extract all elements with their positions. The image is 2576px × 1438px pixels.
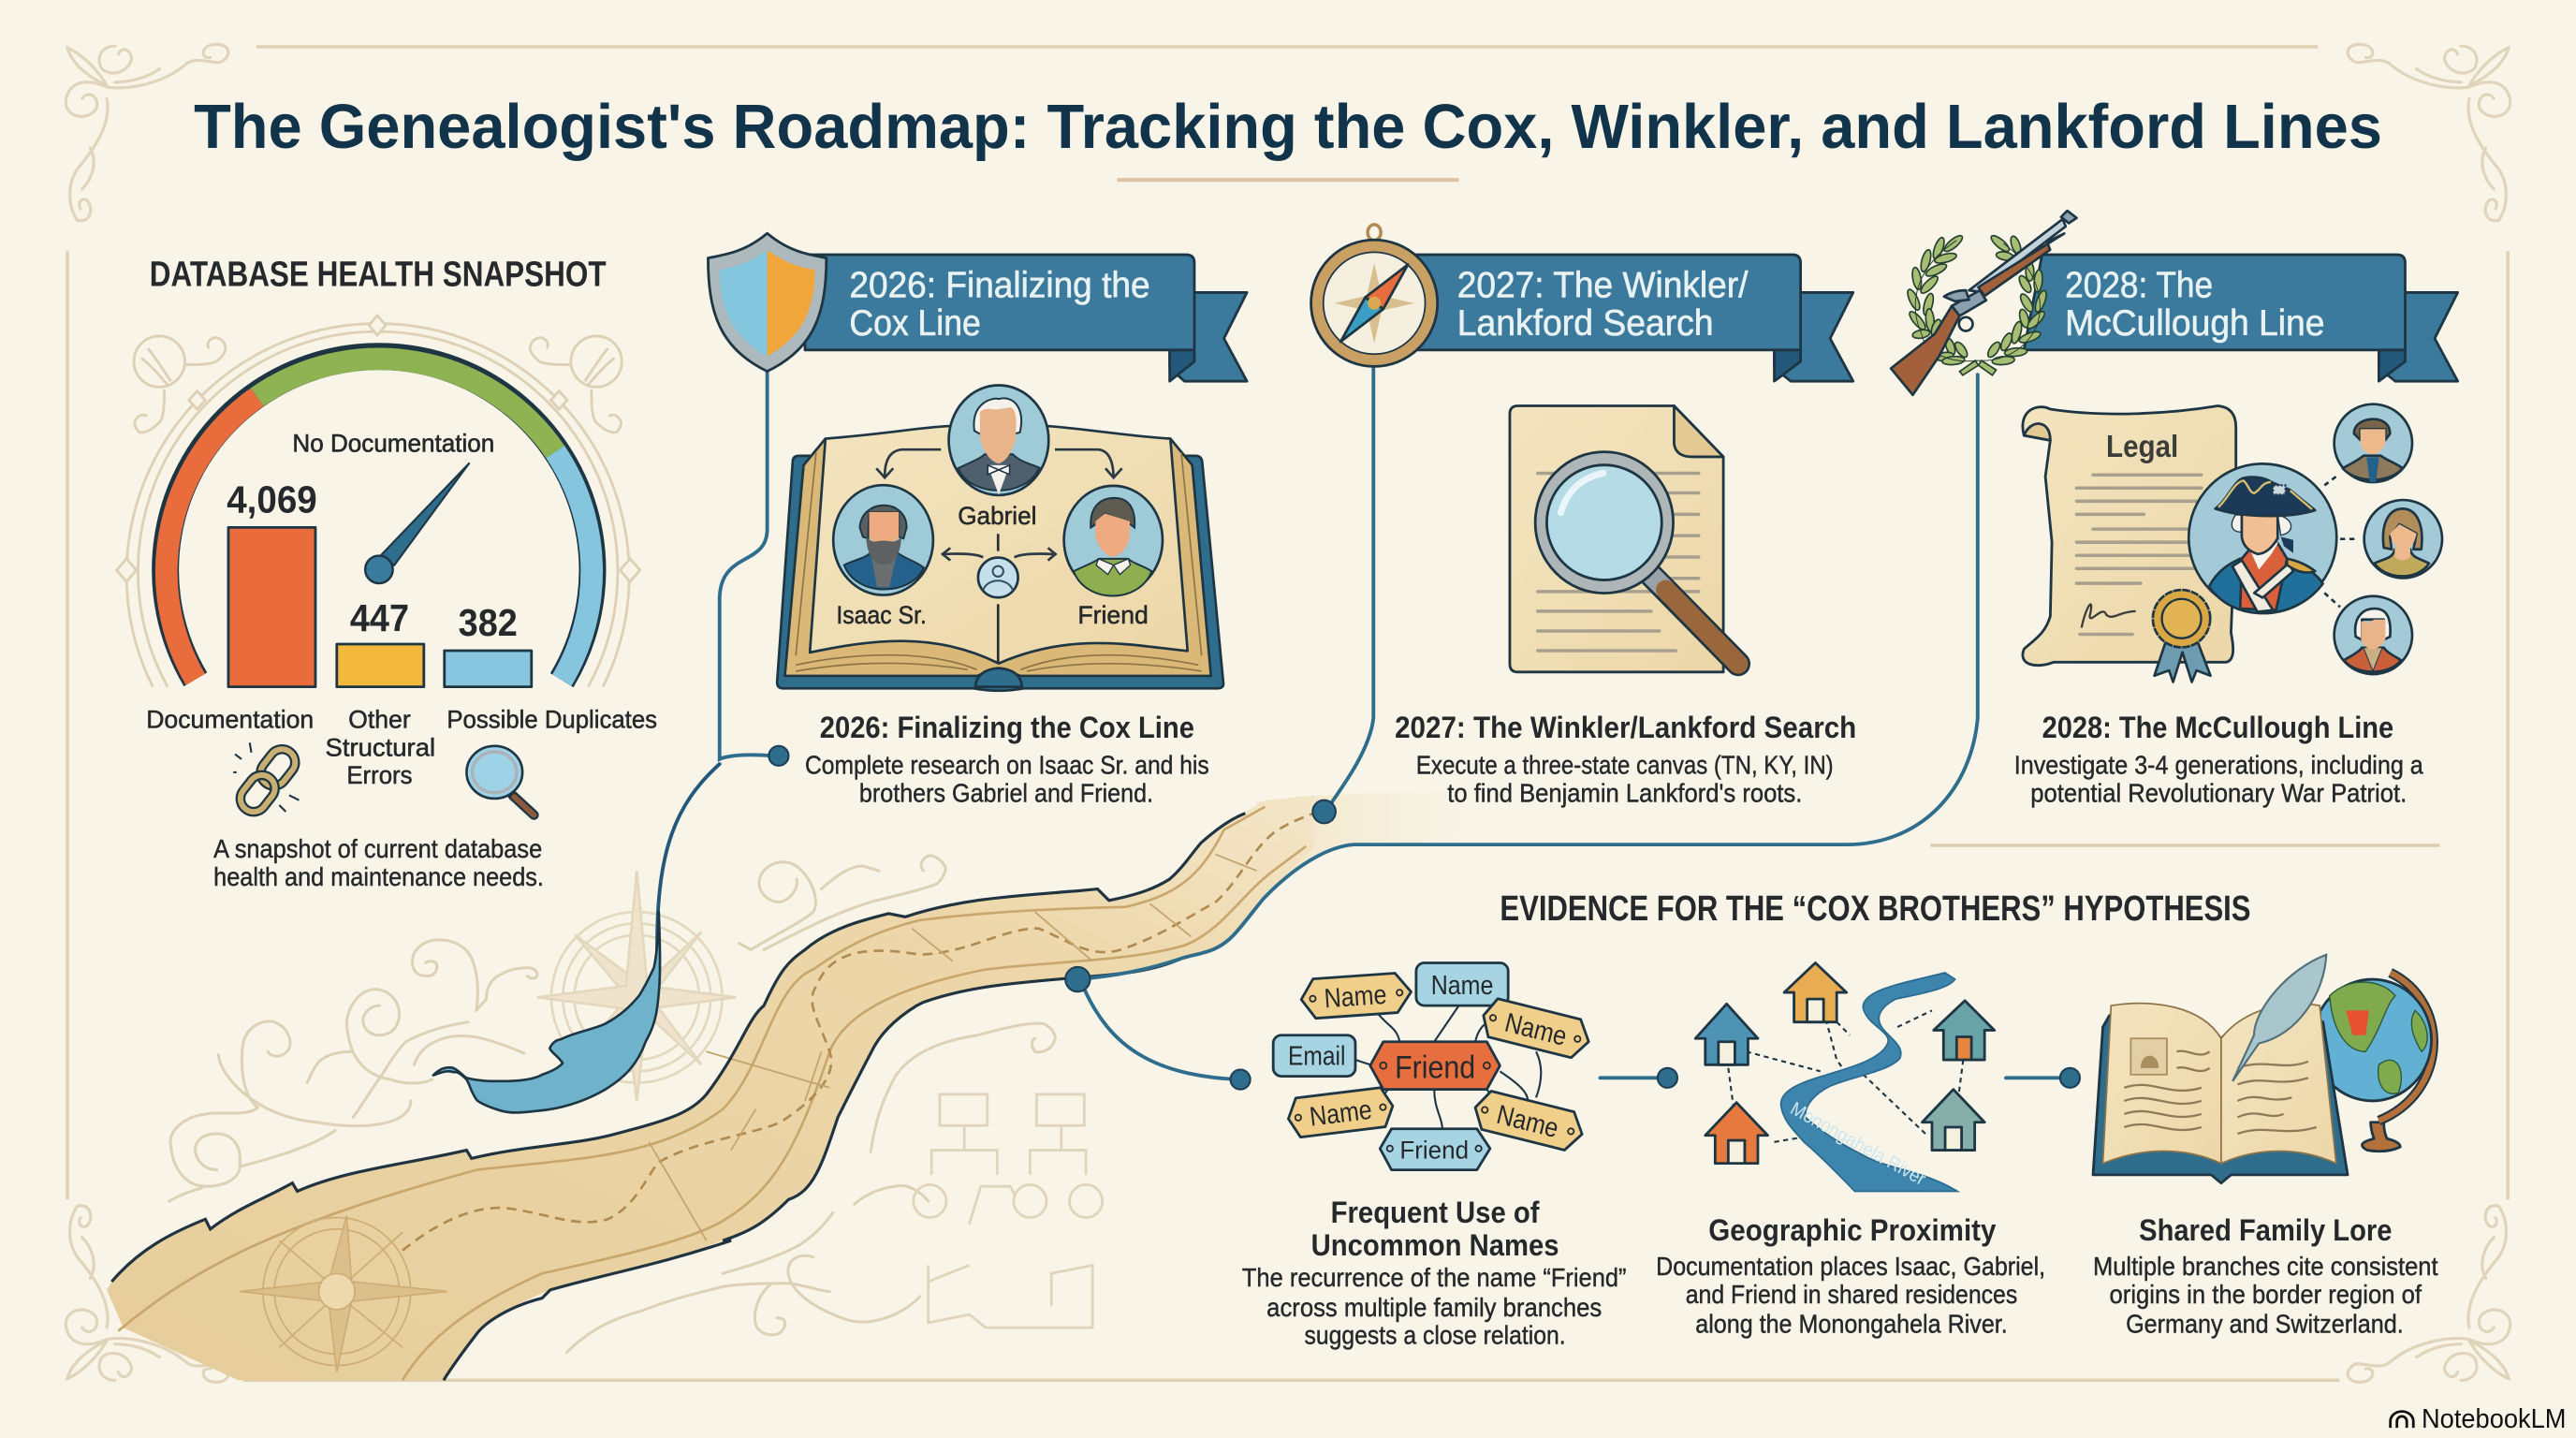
evidence: geographic proximity text: Geographic Proximity: [1708, 1213, 1996, 1247]
bar: possible duplicates 382: 382: [459, 601, 518, 644]
milestone 2028 text: [2014, 711, 2423, 807]
scroll heading: Legal: [2106, 430, 2178, 464]
milestone 2027 text: [1395, 711, 1856, 807]
snapshot heading: DATABASE HEALTH SNAPSHOT: [150, 254, 607, 293]
banner 2026: Cox Line: [849, 303, 981, 344]
banner 2027: [1397, 255, 1853, 381]
bar labels: Other: [348, 705, 411, 734]
illustration: book, quill and globe: [2093, 955, 2434, 1183]
book labels: [836, 501, 1149, 629]
evidence: geographic proximity text: Documentation places Isaac, Gabriel,: [1656, 1252, 2045, 1281]
evidence: geographic proximity text: and Friend in shared residences: [1686, 1280, 2017, 1309]
connector dots: [768, 746, 2080, 1090]
evidence: geographic proximity text: along the Monongahela River.: [1695, 1309, 2008, 1338]
bar: other structural errors 447: 447: [350, 596, 409, 639]
title: The Genealogist's Roadmap: Tracking the Cox, Winkler, and Lankford Lines: [194, 93, 2382, 162]
seal: [2153, 590, 2211, 682]
bar: documentation 4,069: [227, 478, 317, 687]
milestone 2027 text: to find Benjamin Lankford's roots.: [1447, 778, 1802, 807]
house yellow: [1784, 962, 1847, 1022]
icon: broken chain: [233, 742, 300, 817]
portrait: Friend: [1064, 486, 1163, 596]
evidence: uncommon names text: Frequent Use of: [1331, 1196, 1540, 1229]
dotted links: [2324, 476, 2359, 607]
snapshot caption: A snapshot of current database: [213, 834, 542, 863]
house teal: [1934, 1001, 1995, 1060]
node: Friend centre: Friend: [1395, 1049, 1475, 1085]
gauge arc: [166, 357, 593, 681]
compass rose on road: [240, 1216, 446, 1372]
node: Name 2: [1416, 962, 1508, 1005]
center icon: [978, 558, 1018, 597]
icon: compass: [1311, 225, 1438, 366]
blue ribbon tail: [433, 912, 660, 1112]
banner 2027: 2027: The Winkler/: [1457, 266, 1749, 306]
signature: [2082, 605, 2136, 627]
node: Friend centre: [1370, 1042, 1500, 1090]
node: Name 1: [1300, 972, 1412, 1020]
evidence: uncommon names text: suggests a close relation.: [1305, 1321, 1566, 1350]
book labels: Friend: [1077, 600, 1149, 629]
portrait middle: [2364, 500, 2442, 578]
node: Name 4: Name: [1308, 1095, 1373, 1133]
evidence: uncommon names text: [1242, 1196, 1627, 1350]
parchment road: [107, 792, 1471, 1380]
illustration: document under magnifier: [1510, 406, 1738, 672]
node: Email: [1273, 1035, 1355, 1077]
icon: wreath and musket: [1891, 211, 2077, 395]
portrait: Isaac Sr.: [833, 485, 933, 595]
evidence: uncommon names text: Uncommon Names: [1311, 1228, 1559, 1262]
bar: documentation 4,069: 4,069: [227, 478, 317, 521]
connector lines: [657, 365, 2070, 1079]
house blue: [1695, 1004, 1758, 1064]
bar labels: Possible Duplicates: [446, 705, 657, 734]
snapshot caption: [213, 834, 544, 891]
evidence: shared family lore text: Multiple branches cite consistent: [2093, 1252, 2438, 1281]
house green: [1922, 1090, 1984, 1151]
node: Name 5: Name: [1494, 1100, 1561, 1144]
gauge ornament: [117, 315, 640, 687]
evidence: shared family lore text: Shared Family Lore: [2139, 1213, 2392, 1247]
node: Name 4: [1286, 1086, 1395, 1138]
bar: other structural errors 447: [337, 596, 424, 687]
river label: Monongahela River: [1787, 1098, 1929, 1190]
evidence: geographic proximity text: [1656, 1213, 2045, 1338]
illustration: legal scroll and patriot: [2023, 404, 2442, 682]
banner 2028: 2028: The: [2065, 266, 2213, 306]
background swirls: [169, 856, 1055, 1352]
milestone 2026 text: [805, 711, 1209, 807]
illustration: family book: [777, 386, 1223, 691]
icon: shield: [708, 233, 827, 372]
evidence: shared family lore text: [2093, 1213, 2438, 1338]
bar: possible duplicates 382: [445, 601, 532, 687]
node: Name 2: Name: [1431, 971, 1493, 1001]
milestone 2026 text: 2026: Finalizing the Cox Line: [820, 711, 1194, 744]
milestone 2027 text: Execute a three-state canvas (TN, KY, IN): [1416, 751, 1834, 780]
patriot portrait: [2188, 463, 2336, 613]
node: Name 3: Name: [1501, 1008, 1570, 1052]
snapshot caption: health and maintenance needs.: [213, 862, 544, 891]
NotebookLM watermark: NotebookLM: [2422, 1404, 2566, 1434]
faded compass rose: [537, 871, 736, 1101]
evidence heading: EVIDENCE FOR THE “COX BROTHERS” HYPOTHESIS: [1500, 888, 2250, 928]
bar labels: Structural: [326, 732, 435, 761]
evidence: shared family lore text: origins in the border region of: [2110, 1280, 2422, 1309]
banner 2028: [2024, 255, 2458, 381]
node: Friend lower: Friend: [1399, 1135, 1469, 1164]
evidence: uncommon names text: across multiple family branches: [1266, 1293, 1602, 1322]
node: Name 5: [1471, 1089, 1587, 1153]
evidence: shared family lore text: Germany and Switzerland.: [2126, 1309, 2404, 1338]
section: database health snapshot: [117, 254, 657, 891]
title rule: [1117, 179, 1459, 181]
milestone 2028 text: potential Revolutionary War Patriot.: [2030, 778, 2407, 807]
node: Email: Email: [1288, 1041, 1345, 1071]
illustration: name network: [1273, 962, 1593, 1170]
milestone 2026 text: brothers Gabriel and Friend.: [859, 778, 1153, 807]
portrait bottom: [2334, 596, 2412, 674]
banner 2027: Lankford Search: [1457, 303, 1714, 344]
node: Friend lower: [1380, 1129, 1490, 1170]
milestone 2028 text: Investigate 3-4 generations, including a: [2014, 751, 2423, 780]
banner 2026: 2026: Finalizing the: [849, 266, 1150, 306]
node: Name 3: [1479, 996, 1593, 1061]
gauge needle: [365, 463, 469, 583]
bar labels: [146, 705, 657, 789]
milestone 2027 text: 2027: The Winkler/Lankford Search: [1395, 711, 1856, 744]
banner 2026: [805, 255, 1247, 381]
arrows: [885, 449, 1114, 557]
gauge label: No Documentation: [292, 429, 494, 458]
house orange: [1705, 1103, 1767, 1164]
banner 2028: McCullough Line: [2065, 303, 2324, 344]
node: Name 1: Name: [1324, 980, 1387, 1014]
icon: magnifier: [466, 746, 534, 815]
evidence: uncommon names text: The recurrence of the name “Friend”: [1242, 1263, 1627, 1292]
bar labels: Errors: [346, 760, 413, 789]
portrait: Gabriel: [949, 386, 1048, 495]
book labels: Gabriel: [958, 501, 1036, 530]
bar labels: Documentation: [146, 705, 314, 734]
portrait top: [2334, 404, 2412, 482]
milestone 2026 text: Complete research on Isaac Sr. and his: [805, 751, 1209, 780]
faded family tree sketch: [914, 1094, 1103, 1328]
illustration: river and houses: [1695, 962, 1995, 1191]
milestone 2028 text: 2028: The McCullough Line: [2042, 711, 2393, 744]
book labels: Isaac Sr.: [836, 600, 927, 629]
